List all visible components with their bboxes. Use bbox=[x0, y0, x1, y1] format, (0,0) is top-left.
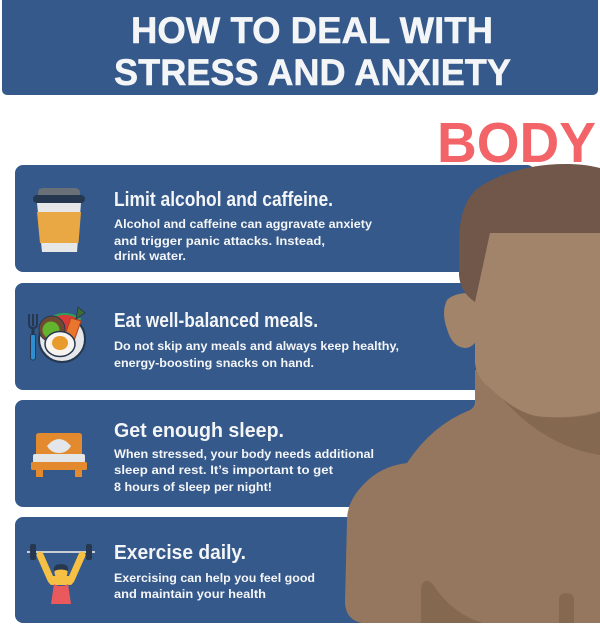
body text bbox=[114, 339, 399, 370]
body text: Exercising can help you feel good bbox=[114, 571, 315, 585]
body text: 8 hours of sleep per night! bbox=[114, 480, 272, 494]
icon: bed bbox=[31, 433, 87, 477]
icon: coffee cup bbox=[33, 188, 85, 252]
panel: limit alcohol and caffeine bbox=[15, 165, 535, 272]
title: STRESS AND ANXIETY bbox=[114, 52, 511, 93]
icon: meal plate with fork bbox=[29, 307, 85, 362]
body text: energy-boosting snacks on hand. bbox=[114, 356, 314, 370]
body text: and maintain your health bbox=[114, 587, 266, 601]
body text: and trigger panic attacks. Instead, bbox=[114, 234, 325, 248]
heading: Get enough sleep. bbox=[114, 420, 284, 442]
body text bbox=[114, 571, 315, 601]
body text: sleep and rest. It’s important to get bbox=[114, 463, 333, 477]
chest shadows bbox=[421, 581, 483, 623]
icon: weightlifter bbox=[27, 544, 95, 604]
body text bbox=[114, 447, 374, 494]
body text: When stressed, your body needs additional bbox=[114, 447, 374, 461]
section heading: body: BODY bbox=[437, 111, 596, 175]
body text: drink water. bbox=[114, 249, 186, 263]
heading: Eat well-balanced meals. bbox=[114, 310, 318, 332]
panel: get enough sleep bbox=[15, 400, 535, 507]
hair bbox=[459, 164, 600, 302]
header banner bbox=[2, 0, 598, 95]
neck shadow bbox=[493, 388, 600, 455]
body text bbox=[114, 217, 372, 263]
face bbox=[475, 225, 600, 417]
body text: Alcohol and caffeine can aggravate anxiety bbox=[114, 217, 372, 231]
panel: eat well-balanced meals bbox=[15, 283, 535, 390]
body text: Do not skip any meals and always keep healthy, bbox=[114, 339, 399, 353]
heading: Limit alcohol and caffeine. bbox=[114, 189, 333, 211]
figure: man silhouette bbox=[345, 164, 600, 623]
torso and neck bbox=[345, 370, 600, 623]
title bbox=[114, 10, 511, 93]
panel: exercise daily bbox=[15, 517, 535, 623]
heading: Exercise daily. bbox=[114, 542, 246, 564]
title: HOW TO DEAL WITH bbox=[131, 10, 493, 51]
ear bbox=[444, 293, 477, 348]
